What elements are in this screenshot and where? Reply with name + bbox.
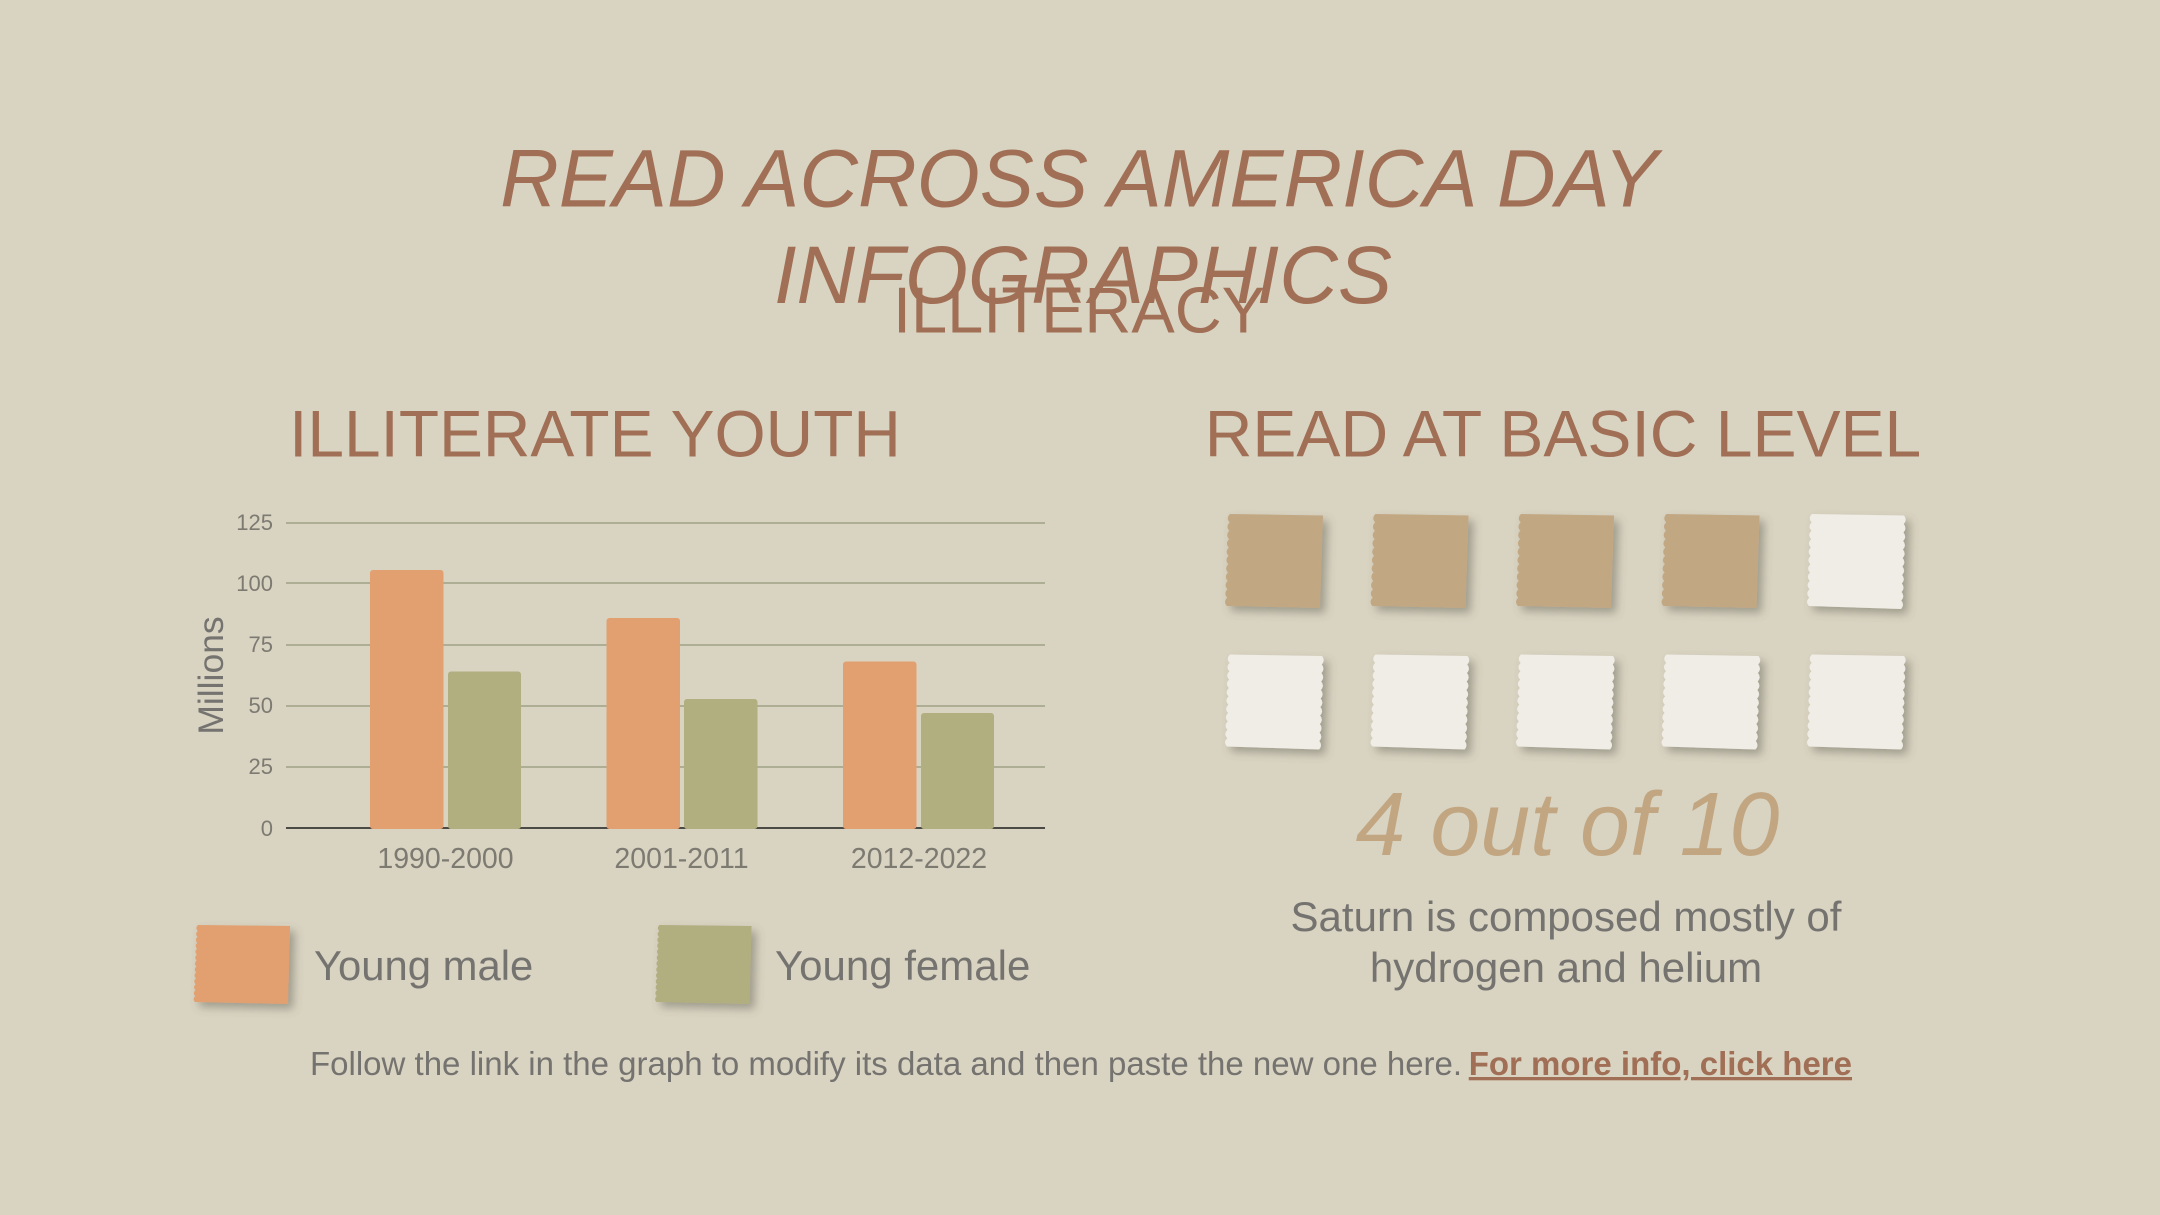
x axis labels [377, 843, 987, 875]
legend: young female [655, 925, 1030, 1004]
pictogram: 4 out of 10 squares [1225, 514, 1906, 750]
y axis tick labels [236, 510, 273, 841]
heading: read at basic level: READ AT BASIC LEVEL [1205, 396, 1921, 470]
title: READ ACROSS AMERICA DAY [500, 134, 1664, 224]
y axis tick labels: 75 [249, 632, 273, 657]
legend: young male [194, 925, 533, 1004]
y axis tick labels: 125 [236, 510, 273, 535]
y axis tick labels: 50 [249, 693, 273, 718]
legend: young female: Young female [775, 942, 1030, 989]
x axis labels: 2012-2022 [851, 843, 987, 875]
legend: young male: Young male [314, 942, 533, 989]
title: INFOGRAPHICS [774, 231, 1392, 321]
x axis labels: 2001-2011 [614, 843, 749, 875]
bar chart [191, 510, 1045, 875]
y axis title: Millions [191, 616, 231, 735]
y axis tick labels: 0 [261, 816, 273, 841]
y axis tick labels: 25 [249, 754, 273, 779]
stat: 4 out of 10: 4 out of 10 [1356, 775, 1780, 875]
bars: 2012-2022 [843, 662, 994, 829]
y axis tick labels: 100 [236, 571, 273, 596]
description text: hydrogen and helium [1370, 944, 1762, 991]
description text: Saturn is composed mostly of [1291, 893, 1842, 940]
bars: 2001-2011 [606, 618, 758, 829]
bars: 1990-2000 [370, 570, 521, 829]
x axis labels: 1990-2000 [377, 843, 514, 875]
heading: illiterate youth: ILLITERATE YOUTH [289, 396, 901, 470]
subtitle: illiteracy: ILLITERACY [893, 274, 1265, 346]
footer note with link: Follow the link in the graph to modify its data and then paste the new one here. For more info, click here [310, 1045, 1852, 1082]
